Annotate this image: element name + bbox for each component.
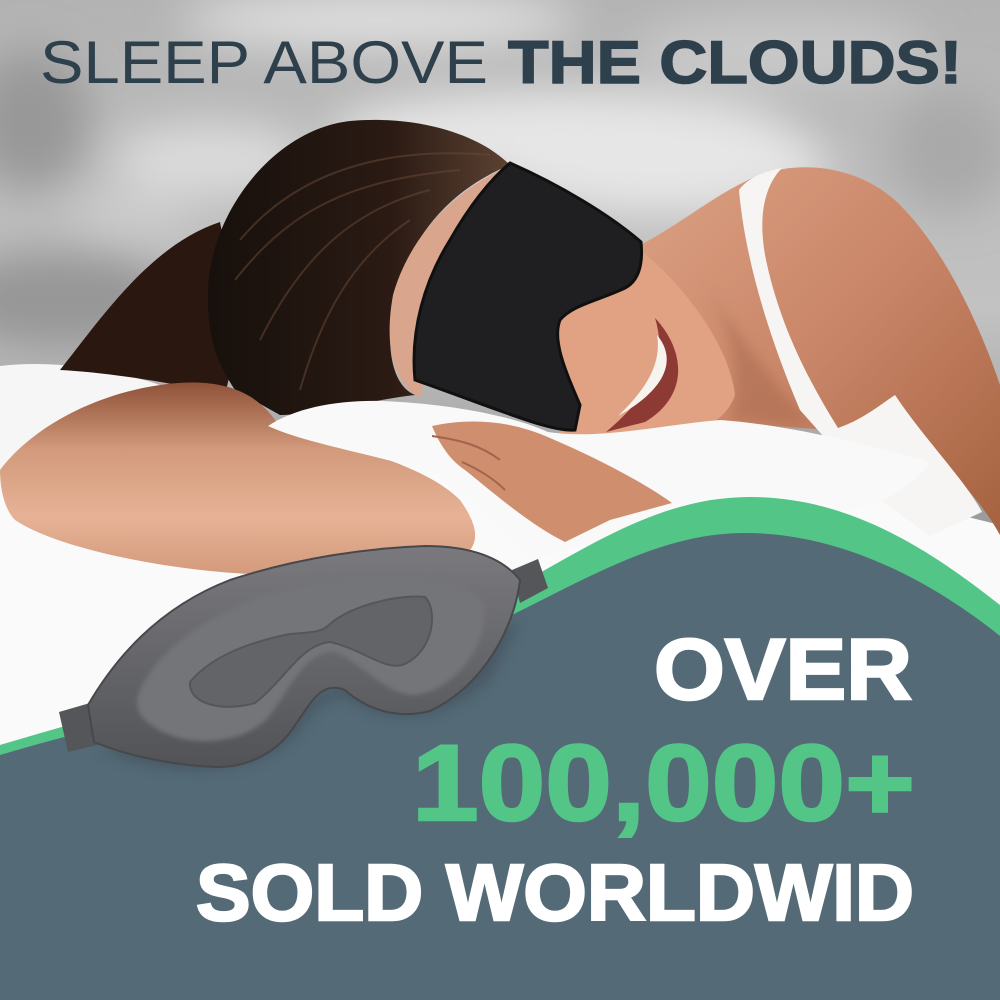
neck shadow xyxy=(700,280,810,425)
left arm xyxy=(0,383,475,575)
eye cup inner hollow xyxy=(190,597,432,707)
white tank top xyxy=(739,168,982,536)
green curved band xyxy=(0,497,1000,1000)
center pillow xyxy=(268,401,930,560)
callout: sold worldwide: OVER xyxy=(654,622,912,718)
face xyxy=(540,250,735,438)
left pillow xyxy=(0,364,160,470)
slate bottom panel xyxy=(0,533,1000,1000)
woman: torso and arm xyxy=(640,167,1000,535)
product: grey contoured sleep mask xyxy=(59,546,548,770)
bed sheet xyxy=(0,420,1000,760)
left strap xyxy=(59,703,98,752)
smile xyxy=(606,318,678,432)
title: THE CLOUDS! xyxy=(508,29,962,96)
right strap xyxy=(512,559,548,603)
eye cup ridge xyxy=(137,574,485,741)
callout: sold worldwide: 100,000+ xyxy=(412,722,915,843)
title: SLEEP ABOVE xyxy=(40,29,488,96)
hair xyxy=(208,120,510,415)
drop shadow xyxy=(100,620,520,770)
black sleep mask worn xyxy=(414,163,642,430)
ponytail xyxy=(60,222,240,395)
callout: sold worldwide: SOLD WORLDWID xyxy=(196,848,914,937)
hand on pillow xyxy=(432,422,672,542)
forehead and temple xyxy=(390,165,510,398)
callout: sold worldwide xyxy=(196,622,915,937)
cloudy sky background xyxy=(0,0,1000,560)
title xyxy=(40,29,962,96)
mask body xyxy=(88,546,520,767)
